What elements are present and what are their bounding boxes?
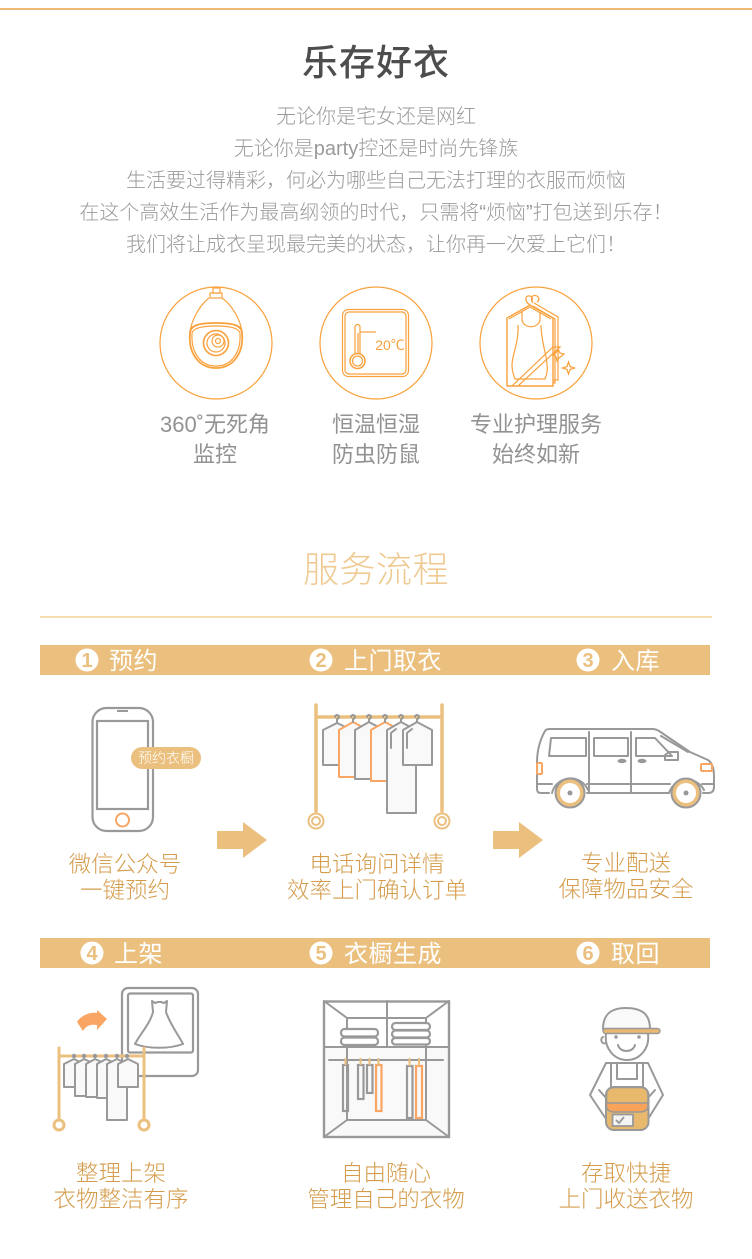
- icon: delivery worker: [590, 1008, 663, 1130]
- icon: phone: [92, 708, 201, 831]
- intro text block: 在这个高效生活作为最高纲领的时代，只需将“烦恼”打包送到乐存！: [79, 201, 673, 224]
- intro text block: 生活要过得精彩，何必为哪些自己无法打理的衣服而烦恼: [126, 169, 626, 192]
- captions: steps 4-6: 管理自己的衣物: [307, 1187, 465, 1212]
- icon: thermostat: 20℃: [375, 337, 405, 353]
- header bar: steps 4-6: 6: [582, 943, 594, 965]
- feature labels: 恒温恒湿: [332, 412, 420, 437]
- captions: steps 4-6: 整理上架: [76, 1161, 166, 1186]
- feature labels: 始终如新: [492, 442, 580, 467]
- captions: steps 4-6: 上门收送衣物: [558, 1187, 694, 1212]
- title: 乐存好衣: [302, 42, 450, 83]
- intro text block: 无论你是宅女还是网红: [276, 105, 476, 128]
- header bar: steps 1-3: 1: [81, 650, 93, 672]
- captions: steps 1-3: 保障物品安全: [558, 877, 694, 902]
- header bar: steps 1-3: 预约: [109, 648, 158, 675]
- feature labels: [160, 412, 602, 467]
- header bar: steps 1-3: 入库: [611, 648, 660, 675]
- header bar: steps 1-3: 3: [582, 650, 594, 672]
- captions: steps 1-3: [69, 851, 694, 903]
- arrow: [217, 822, 267, 858]
- header bar: steps 4-6: 4: [86, 943, 98, 965]
- icon: clothes rack: [308, 705, 450, 828]
- icon: thermostat: [320, 287, 432, 399]
- icon: garment care: [480, 287, 592, 399]
- header bar: steps 4-6: 取回: [611, 941, 660, 968]
- icon: camera: [160, 287, 272, 399]
- icon: van: [537, 729, 714, 808]
- icon: wardrobe: [324, 1001, 449, 1137]
- feature labels: 防虫防鼠: [332, 442, 420, 467]
- header bar: steps 1-3: 上门取衣: [344, 648, 442, 675]
- header bar: steps 4-6: [40, 938, 710, 968]
- icon: phone: 预约衣橱: [138, 750, 194, 766]
- captions: steps 4-6: [53, 1161, 694, 1212]
- header bar: steps 4-6: 衣橱生成: [344, 941, 442, 968]
- captions: steps 4-6: 存取快捷: [581, 1161, 671, 1186]
- intro text block: 我们将让成衣呈现最完美的状态，让你再一次爱上它们！: [126, 233, 626, 256]
- captions: steps 1-3: 效率上门确认订单: [287, 878, 467, 903]
- captions: steps 1-3: 一键预约: [80, 878, 170, 903]
- captions: steps 1-3: 微信公众号: [69, 852, 181, 877]
- section heading: 服务流程: [303, 549, 449, 590]
- feature labels: 360˚无死角: [160, 412, 270, 437]
- captions: steps 1-3: 电话询问详情: [309, 852, 445, 877]
- icon: shelving with dress and rack: [54, 988, 198, 1130]
- feature labels: 监控: [193, 442, 237, 467]
- captions: steps 4-6: 自由随心: [341, 1161, 431, 1186]
- header bar: steps 1-3: [40, 645, 710, 675]
- feature labels: 专业护理服务: [470, 412, 602, 437]
- captions: steps 1-3: 专业配送: [581, 851, 671, 876]
- header bar: steps 1-3: 2: [315, 650, 327, 672]
- intro text block: [79, 105, 673, 256]
- arrow: [493, 822, 543, 858]
- captions: steps 4-6: 衣物整洁有序: [53, 1187, 189, 1212]
- intro text block: 无论你是party控还是时尚先锋族: [234, 137, 518, 160]
- header bar: steps 4-6: 上架: [114, 941, 163, 968]
- header bar: steps 4-6: 5: [315, 943, 327, 965]
